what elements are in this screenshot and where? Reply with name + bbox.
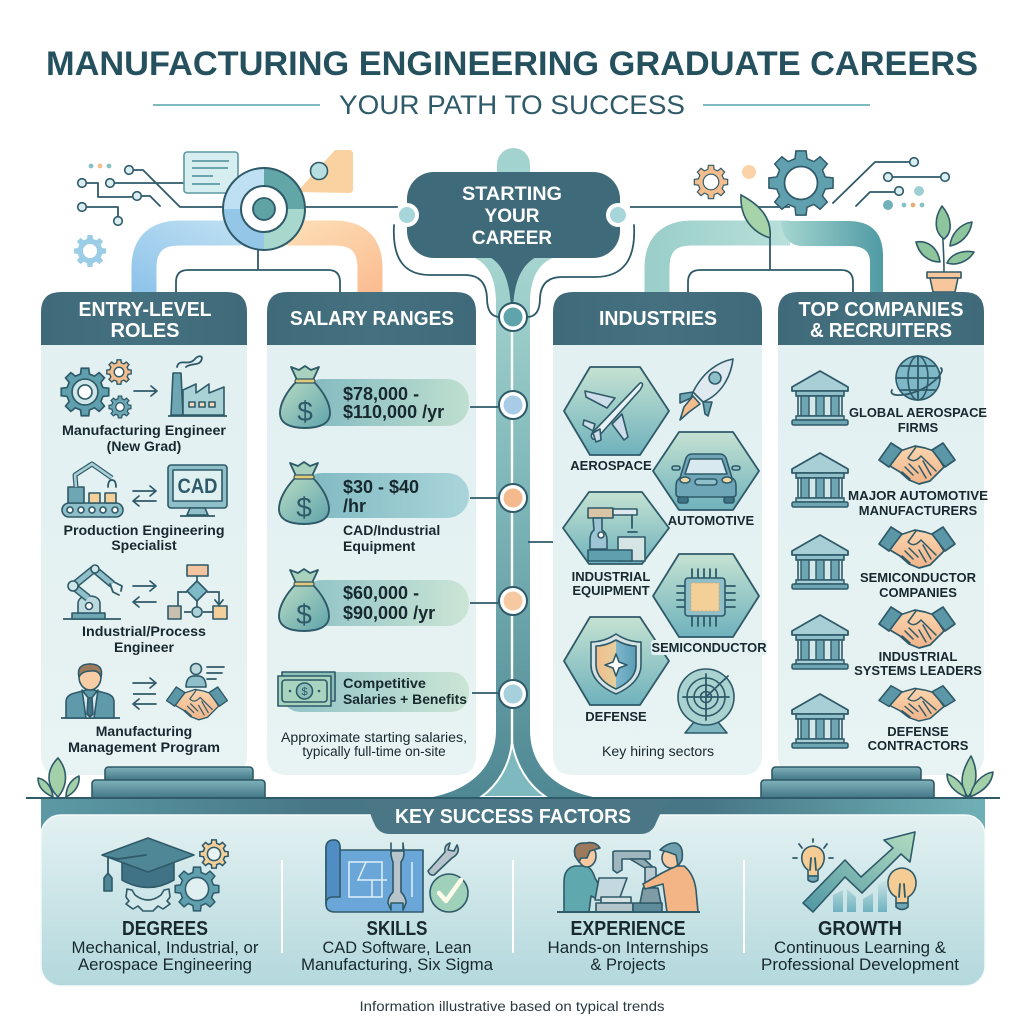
starting your career box: STARTING — [462, 184, 562, 205]
label: manufacturing engineer: (New Grad) — [107, 438, 181, 454]
note: key hiring sectors: Key hiring sectors — [602, 744, 714, 759]
heading: key success factors: KEY SUCCESS FACTORS — [395, 806, 631, 828]
icon: person to handshake — [61, 664, 227, 720]
heading: entry-level roles — [41, 292, 247, 345]
heading: industries: INDUSTRIES — [599, 308, 717, 330]
salary item: hourly range: CAD/Industrial — [343, 522, 440, 538]
icon: bank 5 — [792, 694, 848, 748]
node: start box right — [608, 205, 628, 225]
panel: key success factors — [41, 799, 985, 986]
industry connector line — [528, 541, 553, 543]
hex: aerospace — [564, 367, 669, 473]
heading: top companies and recruiters: TOP COMPANIES — [798, 299, 964, 321]
icon: engineers with robot arm — [557, 843, 700, 912]
panel: salary ranges — [267, 292, 476, 775]
salary item: competitive salaries: $ — [301, 686, 308, 698]
dividers — [282, 860, 744, 953]
icon: large teal gear — [769, 151, 833, 215]
footer note: Information illustrative based on typical trends — [360, 998, 664, 1014]
icon: robot arm to flowchart — [63, 565, 227, 619]
hex: automotive: AUTOMOTIVE — [668, 513, 755, 528]
heading: salary ranges — [267, 292, 476, 345]
icon: radar dish — [678, 669, 734, 733]
factor: experience — [548, 843, 708, 974]
label: semiconductor companies: SEMICONDUCTOR — [860, 570, 977, 585]
factor: degrees: DEGREES — [122, 918, 208, 940]
label: industrial systems leaders — [854, 649, 982, 678]
salary item: hourly range: /hr — [343, 496, 366, 516]
icon: left hub circle — [223, 168, 305, 250]
icon: orange dot — [742, 165, 756, 179]
left circuit decoration — [78, 164, 224, 225]
label: manufacturing management program: Management Program — [68, 739, 220, 755]
factor: growth: GROWTH — [818, 918, 902, 940]
factor: growth: Professional Development — [761, 956, 959, 974]
label: manufacturing management program: Manufacturing — [96, 723, 192, 739]
starting your career box: CAREER — [472, 228, 552, 249]
note: approximate salaries: Approximate starting salaries, — [281, 730, 467, 745]
icon: document — [184, 152, 238, 193]
hex: automotive — [653, 432, 759, 528]
icon: bank 2 — [792, 453, 848, 507]
note: approximate salaries — [281, 730, 467, 759]
factor: skills — [301, 840, 494, 974]
label: global aerospace firms — [849, 405, 987, 435]
salary item: hourly range: $ — [296, 492, 312, 523]
icon: globe — [891, 356, 942, 400]
central career trunk — [428, 148, 598, 798]
left arches — [144, 233, 370, 292]
label: major automotive manufacturers — [848, 488, 988, 518]
salary item: hourly range: $30 - $40 — [343, 477, 419, 497]
hex: aerospace: AEROSPACE — [570, 458, 652, 473]
icon: bank 1 — [792, 371, 848, 425]
label: industrial systems leaders: SYSTEMS LEADERS — [854, 663, 982, 678]
heading: entry-level roles: ENTRY-LEVEL — [78, 299, 212, 321]
curved connectors from start box — [394, 225, 634, 317]
label: industrial process engineer — [82, 623, 206, 655]
factor: experience: EXPERIENCE — [570, 918, 686, 940]
label: defense contractors: DEFENSE — [887, 724, 949, 739]
icon: handshake 1 — [879, 443, 955, 484]
panel: top companies and recruiters — [778, 292, 988, 775]
icon: handshake 2 — [879, 527, 955, 568]
salary item: competitive salaries: Competitive — [343, 676, 427, 691]
icon: central leaf — [741, 195, 770, 238]
icon: orange shape with circle — [297, 150, 353, 193]
icon: right ground plant — [947, 756, 993, 797]
label: global aerospace firms: GLOBAL AEROSPACE — [849, 405, 987, 420]
salary item: hourly range: Equipment — [343, 538, 416, 554]
subtitle: YOUR PATH TO SUCCESS — [339, 90, 685, 120]
panel: industries — [553, 292, 767, 775]
icon: growth arrow and bulbs — [793, 832, 916, 912]
label: semiconductor companies — [860, 570, 977, 600]
icon: gears to factory — [61, 356, 227, 418]
hex: industrial equipment: EQUIPMENT — [572, 583, 650, 598]
heading: industries — [553, 292, 762, 345]
label: production engineering specialist: Specialist — [111, 537, 177, 553]
factor: degrees: Aerospace Engineering — [78, 956, 252, 974]
heading: entry-level roles: ROLES — [111, 320, 179, 342]
label: semiconductor: SEMICONDUCTOR — [652, 640, 767, 655]
label: industrial process engineer: Engineer — [114, 639, 175, 655]
label: production engineering specialist — [64, 522, 224, 553]
salary item: yearly range 2: $ — [296, 599, 312, 630]
factor: experience: Hands-on Internships — [548, 939, 708, 957]
icon: potted plant — [916, 206, 974, 292]
heading: key success factors — [360, 799, 676, 834]
salary item: yearly range 1: $ — [297, 396, 313, 427]
right circuit decoration — [833, 158, 949, 210]
salary item: competitive salaries — [278, 672, 469, 712]
icon: small orange gear — [694, 165, 728, 199]
salary item: yearly range 1 — [280, 366, 469, 428]
note: approximate salaries: typically full-time on-site — [302, 744, 446, 759]
right pedestal — [761, 767, 934, 798]
icon: robot conveyor to CAD: CAD — [178, 475, 218, 498]
factor: skills: CAD Software, Lean — [322, 939, 472, 957]
factor: degrees — [72, 838, 259, 974]
salary connector lines — [470, 407, 498, 693]
icon: bank 3 — [792, 535, 848, 589]
hex: semiconductor — [653, 554, 759, 637]
left hub connector lines — [176, 207, 398, 292]
starting your career box — [407, 172, 620, 258]
salary item: hourly range — [279, 462, 469, 554]
icon: blueprint, wrench and check — [326, 840, 468, 912]
title: MANUFACTURING ENGINEERING GRADUATE CAREERS — [46, 45, 978, 83]
heading: salary ranges: SALARY RANGES — [290, 308, 454, 330]
label: defense contractors — [868, 724, 969, 753]
hex: industrial equipment — [563, 492, 669, 598]
factor: growth: Continuous Learning & — [774, 939, 946, 957]
salary item: yearly range 1: $78,000 - — [343, 384, 419, 404]
label: major automotive manufacturers: MANUFACTURERS — [859, 503, 978, 518]
label: semiconductor companies: COMPANIES — [879, 585, 957, 600]
hex: defense: DEFENSE — [585, 709, 647, 724]
label: global aerospace firms: FIRMS — [898, 420, 939, 435]
panel: entry-level roles — [41, 292, 247, 775]
left pedestal — [92, 767, 265, 798]
factor: skills: SKILLS — [366, 918, 428, 940]
salary item: yearly range 2: $60,000 - — [343, 583, 419, 603]
heading: top companies and recruiters: & RECRUITERS — [810, 320, 952, 342]
factor: experience: & Projects — [590, 956, 666, 974]
factor: skills: Manufacturing, Six Sigma — [301, 956, 494, 974]
salary item: yearly range 2: $90,000 /yr — [343, 603, 435, 623]
factor: degrees: Mechanical, Industrial, or — [72, 939, 259, 957]
icon: bank 4 — [792, 615, 848, 669]
timeline nodes — [499, 303, 527, 708]
icon: robot conveyor to CAD — [62, 464, 227, 517]
node: start box left — [397, 205, 417, 225]
label: production engineering specialist: Production Engineering — [64, 522, 224, 538]
icon: left ground plant — [38, 758, 79, 797]
icon: light blue gear — [74, 235, 106, 267]
right arches — [657, 221, 883, 292]
salary item: yearly range 1: $110,000 /yr — [343, 402, 444, 422]
starting your career box: YOUR — [485, 206, 540, 227]
label: manufacturing engineer: Manufacturing Engineer — [62, 422, 227, 438]
hex: industrial equipment: INDUSTRIAL — [572, 569, 650, 584]
label: defense contractors: CONTRACTORS — [868, 738, 969, 753]
label: manufacturing engineer — [62, 422, 227, 454]
icon: rocket — [680, 359, 733, 420]
label: major automotive manufacturers: MAJOR AUTOMOTIVE — [848, 488, 988, 503]
icon: handshake 3 — [879, 607, 955, 648]
salary item: competitive salaries: Salaries + Benefits — [343, 692, 467, 707]
ground line — [26, 797, 1000, 799]
label: industrial process engineer: Industrial/Process — [82, 623, 206, 639]
label: manufacturing management program — [68, 723, 220, 755]
label: industrial systems leaders: INDUSTRIAL — [879, 649, 957, 664]
factor: growth — [761, 832, 959, 974]
salary item: yearly range 2 — [279, 569, 469, 631]
icon: graduation cap and gears — [102, 838, 228, 911]
heading: top companies and recruiters — [778, 292, 984, 345]
icon: handshake 4 — [879, 686, 955, 721]
hex: defense — [564, 617, 669, 724]
right branch lines — [630, 207, 853, 292]
